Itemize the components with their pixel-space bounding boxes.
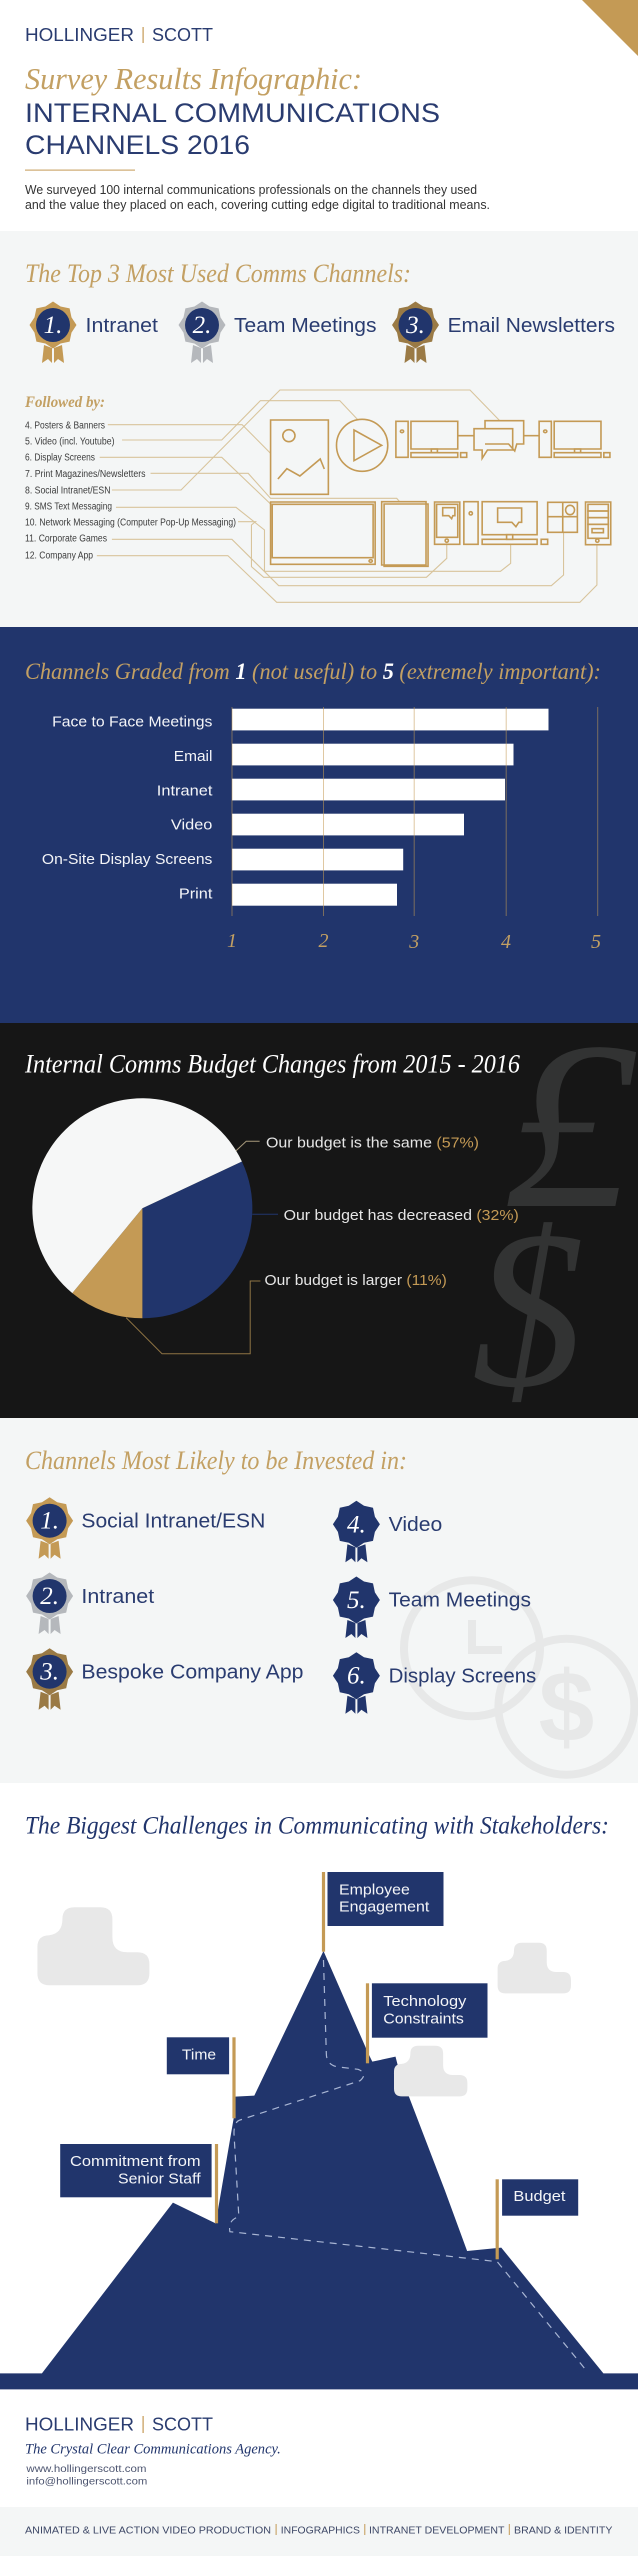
icon: tower app: [586, 502, 611, 545]
watermark: dollar sign: $: [472, 1184, 584, 1434]
item 5: [333, 1576, 531, 1638]
flag: budget: Budget: [513, 2188, 566, 2205]
panel: footer: [0, 2390, 638, 2507]
logo: HOLLINGER: [25, 25, 134, 45]
item 6: 6.: [347, 1663, 366, 1690]
item 5: Team Meetings: [389, 1590, 531, 1612]
icon: poster: [271, 420, 328, 494]
intro text: We surveyed 100 internal communications professionals on the channels they used: [25, 183, 477, 197]
intro text: [25, 183, 490, 212]
item 3: [26, 1648, 304, 1710]
item 1: [26, 1497, 265, 1559]
bar labels: [42, 714, 213, 902]
flag: budget: [496, 2179, 578, 2259]
heading: Channels Most Likely to be Invested in:: [25, 1446, 407, 1475]
channel list: 10. Network Messaging (Computer Pop-Up Messaging): [25, 518, 236, 529]
cloud left: [37, 1907, 149, 1985]
item 2: Intranet: [81, 1586, 155, 1608]
watermark: dollar coin: [498, 1639, 634, 1775]
panel: header: [0, 0, 638, 231]
heading: Channels Graded from 1 (not useful) to 5 (extremely important):: [25, 659, 601, 684]
badge 2: 2.: [193, 312, 211, 339]
flag: time: Time: [182, 2046, 216, 2063]
flag: commitment from senior staff: Commitment from: [70, 2153, 201, 2170]
channel list: 8. Social Intranet/ESN: [25, 485, 110, 496]
panel: services bar: INTRANET DEVELOPMENT: [369, 2524, 505, 2536]
channel list: 12. Company App: [25, 550, 93, 561]
channel list: 5. Video (incl. Youtube): [25, 437, 114, 448]
flag: employee engagement: Engagement: [339, 1898, 430, 1915]
flag: commitment from senior staff: [60, 2144, 218, 2223]
panel: budget changes: [0, 992, 638, 1434]
pie chart: [32, 1098, 252, 1318]
pie labels: [264, 1134, 519, 1289]
panel: services bar: [0, 2507, 638, 2556]
icon: networked computers with chat: [396, 421, 610, 458]
label: Email Newsletters: Email Newsletters: [448, 315, 615, 337]
item 2: 2.: [40, 1583, 59, 1610]
subheading: followed by: Followed by:: [24, 394, 105, 411]
climbing route: [230, 1960, 586, 2370]
flag: technology constraints: Technology: [383, 1993, 467, 2010]
title: Survey Results Infographic:: [25, 61, 362, 96]
icon: phone: [435, 502, 460, 544]
bar labels: Intranet: [157, 782, 213, 799]
watermark: dollar coin: $: [539, 1651, 594, 1763]
cloud right: [498, 1943, 571, 1993]
flag: technology constraints: [366, 1983, 488, 2063]
axis numbers: 4: [501, 931, 511, 953]
pie labels: Our budget is the same (57%): [266, 1134, 479, 1151]
item 4: 4.: [347, 1511, 366, 1538]
watermark: pound sign: £: [504, 992, 637, 1258]
connector lines and device icons: [97, 390, 611, 602]
intro text: and the value they placed on each, covering cutting edge digital to traditional means.: [25, 198, 490, 212]
flag: employee engagement: Employee: [339, 1881, 410, 1898]
channel list: 6. Display Screens: [25, 453, 95, 464]
panel: investment channels: [0, 1418, 638, 1783]
logo: [25, 25, 213, 45]
panel: top channels: [0, 231, 638, 627]
panel: services bar: BRAND & IDENTITY: [514, 2524, 612, 2536]
footer logo: SCOTT: [152, 2415, 213, 2435]
logo: SCOTT: [152, 25, 213, 45]
title: [25, 61, 440, 160]
contact details: [25, 2463, 148, 2487]
bar labels: On-Site Display Screens: [42, 851, 212, 868]
label: Team Meetings: Team Meetings: [234, 315, 376, 337]
grid lines: [232, 707, 598, 916]
item 1: Social Intranet/ESN: [81, 1511, 265, 1533]
bar labels: Video: [171, 817, 212, 834]
flag: time: [167, 2037, 236, 2118]
heading: The Biggest Challenges in Communicating with Stakeholders:: [25, 1813, 609, 1840]
channel list: [25, 420, 236, 561]
tagline: The Crystal Clear Communications Agency.: [25, 2441, 281, 2457]
item 3: Bespoke Company App: [81, 1661, 304, 1683]
contact details: www.hollingerscott.com: [25, 2463, 147, 2475]
icon: computer with message: [464, 502, 548, 544]
item 4: [333, 1501, 442, 1562]
item 4: Video: [389, 1514, 442, 1536]
item 6: [333, 1652, 536, 1714]
item 3: 3.: [39, 1659, 59, 1686]
axis numbers: 1: [227, 930, 237, 952]
badge 3: [392, 302, 439, 363]
label: Intranet: Intranet: [86, 315, 158, 337]
flag: technology constraints: Constraints: [383, 2010, 464, 2027]
badge 1: [30, 302, 76, 363]
axis numbers: 2: [318, 930, 328, 952]
cloud middle: [394, 2046, 467, 2096]
item 6: Display Screens: [389, 1665, 536, 1687]
channel list: 11. Corporate Games: [25, 534, 107, 545]
item 2: [26, 1572, 155, 1634]
corner triangle: [582, 0, 638, 56]
bar labels: Print: [179, 885, 213, 902]
axis numbers: 5: [591, 931, 601, 953]
badge 2: [178, 302, 226, 363]
bar labels: Email: [174, 748, 212, 765]
title: CHANNELS 2016: [25, 130, 250, 160]
icon: display screen: [271, 502, 375, 564]
footer logo: [25, 2415, 213, 2435]
panel: grading chart: [0, 627, 638, 1023]
axis numbers: [227, 930, 601, 953]
contact details: info@hollingerscott.com: [26, 2475, 148, 2487]
badge 1: 1.: [44, 312, 62, 339]
footer logo: HOLLINGER: [25, 2415, 134, 2435]
pie labels: Our budget is larger (11%): [264, 1272, 447, 1289]
flag: employee engagement: [322, 1872, 444, 1952]
item 1: 1.: [40, 1508, 59, 1535]
panel: challenges mountain: [0, 1783, 638, 2390]
bar chart: [42, 707, 601, 953]
channel list: 4. Posters & Banners: [25, 420, 105, 431]
badge 3: 3.: [405, 312, 425, 339]
panel: services bar: INFOGRAPHICS: [281, 2524, 360, 2536]
pie labels: Our budget has decreased (32%): [284, 1207, 519, 1224]
flag: commitment from senior staff: Senior Staff: [118, 2170, 201, 2187]
leader lines: [126, 1141, 278, 1354]
bars: [232, 709, 548, 906]
item 5: 5.: [347, 1587, 366, 1614]
icon: magazine: [382, 502, 428, 566]
axis numbers: 3: [408, 931, 419, 953]
icon: video play: [336, 419, 388, 471]
panel: services bar: ANIMATED & LIVE ACTION VIDEO PRODUCTION: [25, 2524, 271, 2536]
icon: games window: [548, 502, 577, 532]
title: INTERNAL COMMUNICATIONS: [25, 98, 440, 128]
mountain: [0, 1951, 638, 2389]
channel list: 7. Print Magazines/Newsletters: [25, 469, 146, 480]
channel list: 9. SMS Text Messaging: [25, 501, 112, 512]
watermark: clock: [404, 1580, 540, 1716]
heading: Internal Comms Budget Changes from 2015 - 2016: [24, 1050, 520, 1079]
heading: The Top 3 Most Used Comms Channels:: [25, 259, 411, 288]
bar labels: Face to Face Meetings: [52, 714, 212, 731]
